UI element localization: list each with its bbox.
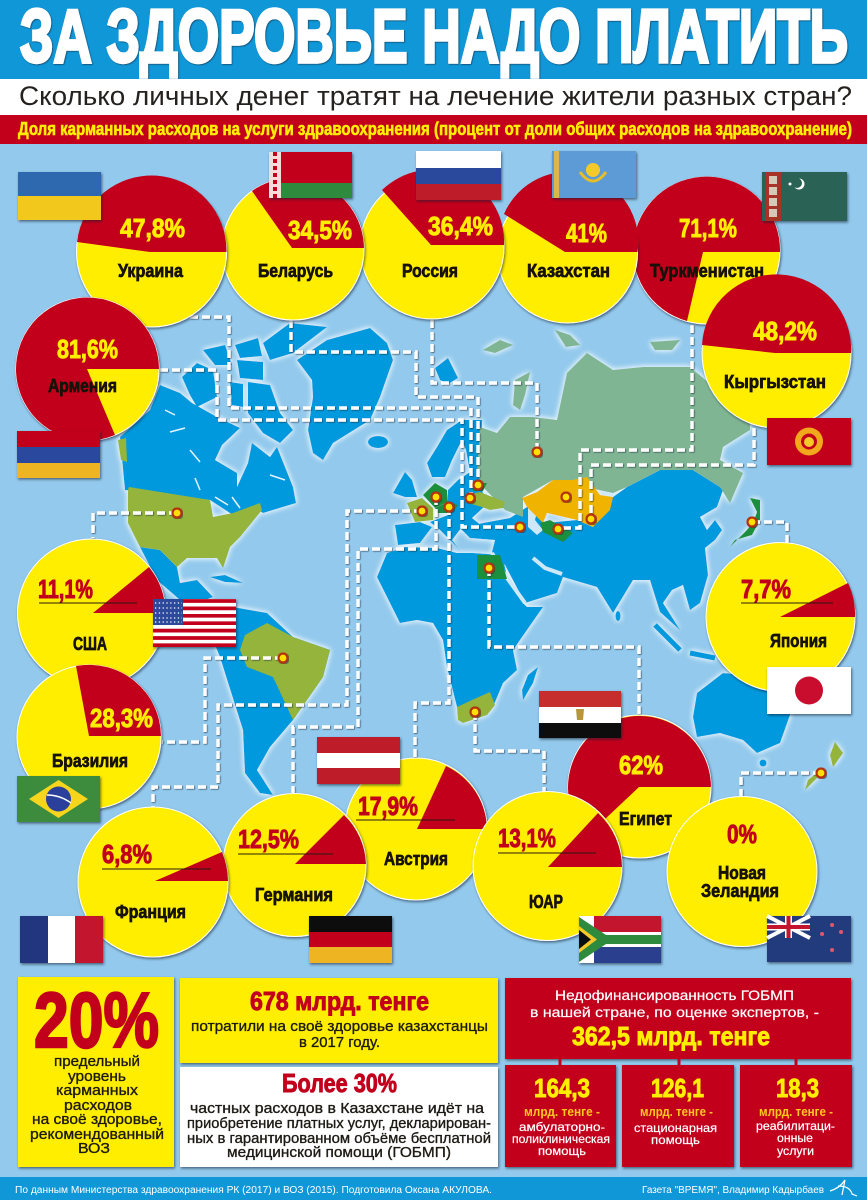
connector: Ukraine [190,317,471,498]
footer band: Газета "ВРЕМЯ", Владимир Кадырбаев [642,1184,824,1196]
flag: Kazakhstan [552,151,636,198]
pie: South Africa: ЮАР [529,892,563,912]
pie: Belarus [222,178,364,320]
panel: 20 percent limit: 20% [34,976,159,1064]
panel: inpatient care: млрд. тенге - [640,1104,713,1119]
panel: 20 percent limit: предельный [54,1053,140,1070]
panel: outpatient care: 164,3 [534,1073,590,1103]
flag: Armenia [17,431,100,478]
panel: 20 percent limit: рекомендованный [30,1126,164,1143]
panel: rehabilitation services: 18,3 [776,1073,819,1103]
pie: Kyrgyzstan: Кыргызстан [724,372,826,392]
pie: Turkmenistan: 71,1% [679,213,737,243]
panel: underfunding total [505,978,851,1059]
pie: South Africa [473,792,622,940]
pie: Brazil: 28,3% [90,703,153,733]
connector: Kyrgyzstan [591,428,754,519]
connector: Japan [752,522,787,543]
flag: Brazil [17,776,100,822]
pie: Belarus: 34,5% [288,215,352,245]
panel: more than 30 percent: приобретение платных услуг, декларирован- [187,1115,491,1132]
pie: Egypt [568,715,711,858]
pie: Russia [360,170,504,319]
pie: USA [18,539,166,687]
flag: Turkmenistan [762,172,847,221]
pie: Kyrgyzstan [702,274,851,428]
flag: New Zealand [767,916,851,962]
panel: rehabilitation services: онные [777,1131,813,1145]
panel: rehabilitation services: млрд. тенге - [759,1104,833,1119]
pie: Turkmenistan [633,177,780,324]
connector: Egypt [489,568,639,715]
panel: 678 billion tenge: в 2017 году. [299,1034,380,1051]
France territory [407,498,433,522]
panel: inpatient care: стационарная [634,1121,717,1135]
panel: underfunding total: 362,5 млрд. тенге [572,1021,770,1051]
connector: South Africa [475,712,544,792]
pie: Belarus: Беларусь [258,261,333,281]
panel: inpatient care [622,1065,734,1167]
New Zealand territory [805,742,843,790]
panel: more than 30 percent: ных в гарантированном объёме бесплатной [187,1130,491,1147]
panel: 678 billion tenge: потратили на своё здоровье казахстанцы [191,1018,488,1035]
pie: Austria [345,758,487,900]
connector: USA [93,513,177,538]
panel: rehabilitation services: реабилитаци- [756,1119,835,1133]
pie: USA: США [73,634,107,654]
Belarus territory [472,483,487,491]
pie: New Zealand [667,796,817,946]
pie: Austria: 17,9% [358,791,418,821]
flag: Belarus [269,152,352,198]
panel: 20 percent limit [18,976,174,1167]
flag: Egypt [539,691,621,738]
panel: more than 30 percent: Более 30% [282,1068,397,1098]
pie: Egypt: Египет [619,809,672,829]
Brazil territory [240,623,330,720]
connector: Austria [415,507,449,758]
connector lines from countries to pies [93,317,821,807]
Germany territory [423,483,448,508]
Japan territory [730,498,760,547]
flag: Ukraine [18,172,101,220]
panel: outpatient care: млрд. тенге - [524,1104,600,1119]
pie: Brazil: Бразилия [52,751,128,771]
pie: Kazakhstan: 41% [566,218,607,248]
icon: author signature [830,1180,857,1196]
flag: Russia [416,151,501,200]
map location markers [172,448,826,778]
pie: Armenia: Армения [48,376,117,396]
panel: 20 percent limit: ВОЗ [78,1140,110,1157]
pie: Turkmenistan: Туркменистан [650,261,764,281]
pie: Ukraine: Украина [118,261,184,281]
pie: South Africa: 13,1% [498,823,556,853]
flag: Japan [767,667,851,714]
panel: underfunding total: в нашей стране, по оценке экспертов, - [530,1004,819,1020]
panel: 678 billion tenge [180,978,498,1063]
panel: inpatient care: 126,1 [651,1073,704,1103]
panel: more than 30 percent [180,1067,498,1167]
pie: Austria: Австрия [384,849,448,869]
pie: Ukraine: 47,8% [120,213,185,243]
pie: France: 6,8% [102,839,152,869]
panel: outpatient care: помощь [538,1144,586,1158]
panel: 20 percent limit: на своё здоровье, [32,1111,162,1128]
pie: France [78,807,228,957]
Turkmenistan territory [540,520,573,542]
Egypt territory [477,555,507,579]
connector: Turkmenistan [558,325,692,528]
world map [118,323,843,795]
connector: France [153,511,422,807]
pie: Armenia: 81,6% [57,334,118,364]
flag: Kyrgyzstan [767,418,851,465]
connector: New Zealand [741,773,821,796]
pie: Japan: 7,7% [741,574,791,604]
panel: rehabilitation services: услуги [777,1144,814,1158]
panel: underfunding total: Недофинансированность ГОБМП [555,987,794,1003]
flag: Austria [317,737,400,784]
pie: Brazil [17,665,161,809]
panel: more than 30 percent: частных расходов в Казахстане идёт на [190,1100,485,1117]
connector: Brazil [162,658,283,742]
flag: USA [153,599,236,647]
pie: Kazakhstan [498,172,638,323]
pie: Germany [223,794,366,936]
header band [0,0,867,79]
South Africa territory [457,692,495,723]
connector: Germany [293,497,436,793]
Ukraine territory [467,492,505,510]
flag: South Africa [579,916,661,963]
footer band [0,1177,867,1200]
panel: outpatient care: амбулаторно- [519,1120,605,1134]
panel: 20 percent limit: уровень [68,1068,126,1085]
pie: Russia: 36,4% [428,211,493,241]
subtitle band: Сколько личных денег тратят на лечение жители разных стран? [19,81,852,111]
pie: New Zealand: 0% [727,819,757,849]
Kazakhstan territory [522,477,613,527]
pie: Japan [706,542,855,692]
Austria territory [435,502,458,513]
pie: USA: 11,1% [38,574,93,604]
panel: 678 billion tenge: 678 млрд. тенге [250,986,429,1016]
flag: Germany [309,916,392,963]
connector: Belarus [291,320,478,485]
pie: Armenia [16,298,159,441]
flag: France [20,916,103,963]
panel: more than 30 percent: медицинской помощи (ГОБМП) [227,1144,451,1161]
pie: Kazakhstan: Казахстан [527,261,610,281]
connector: Armenia [160,370,520,527]
pie: Japan: Япония [770,631,827,651]
red definition band [0,115,867,144]
panel: rehabilitation services [740,1065,852,1167]
USA territory [128,487,262,568]
pie: Egypt: 62% [619,750,663,780]
pie: Germany: Германия [255,885,333,905]
pie: Russia: Россия [402,261,458,281]
pie: New Zealand: Новая [718,863,766,883]
Russia territory [477,353,750,517]
pie: Germany: 12,5% [238,824,299,854]
footer band: По данным Министерства здравоохранения РК (2017) и ВОЗ (2015). Подготовила Оксана АКУЛОВА. [15,1185,492,1196]
panel: inpatient care: помощь [651,1133,700,1147]
panel: 20 percent limit: расходов [64,1097,132,1114]
pie: Kyrgyzstan: 48,2% [753,316,817,346]
panel: 20 percent limit: карманных [56,1082,139,1099]
pie: Ukraine [76,176,227,327]
panel: outpatient care [505,1065,616,1167]
connector: Kazakhstan [566,325,570,497]
pie: France: Франция [115,902,186,922]
connector ticks between underfunding boxes [560,1059,796,1065]
connector: Russia [432,320,537,452]
pie: New Zealand: Зеландия [701,881,779,901]
panel: outpatient care: поликлиническая [512,1132,610,1146]
